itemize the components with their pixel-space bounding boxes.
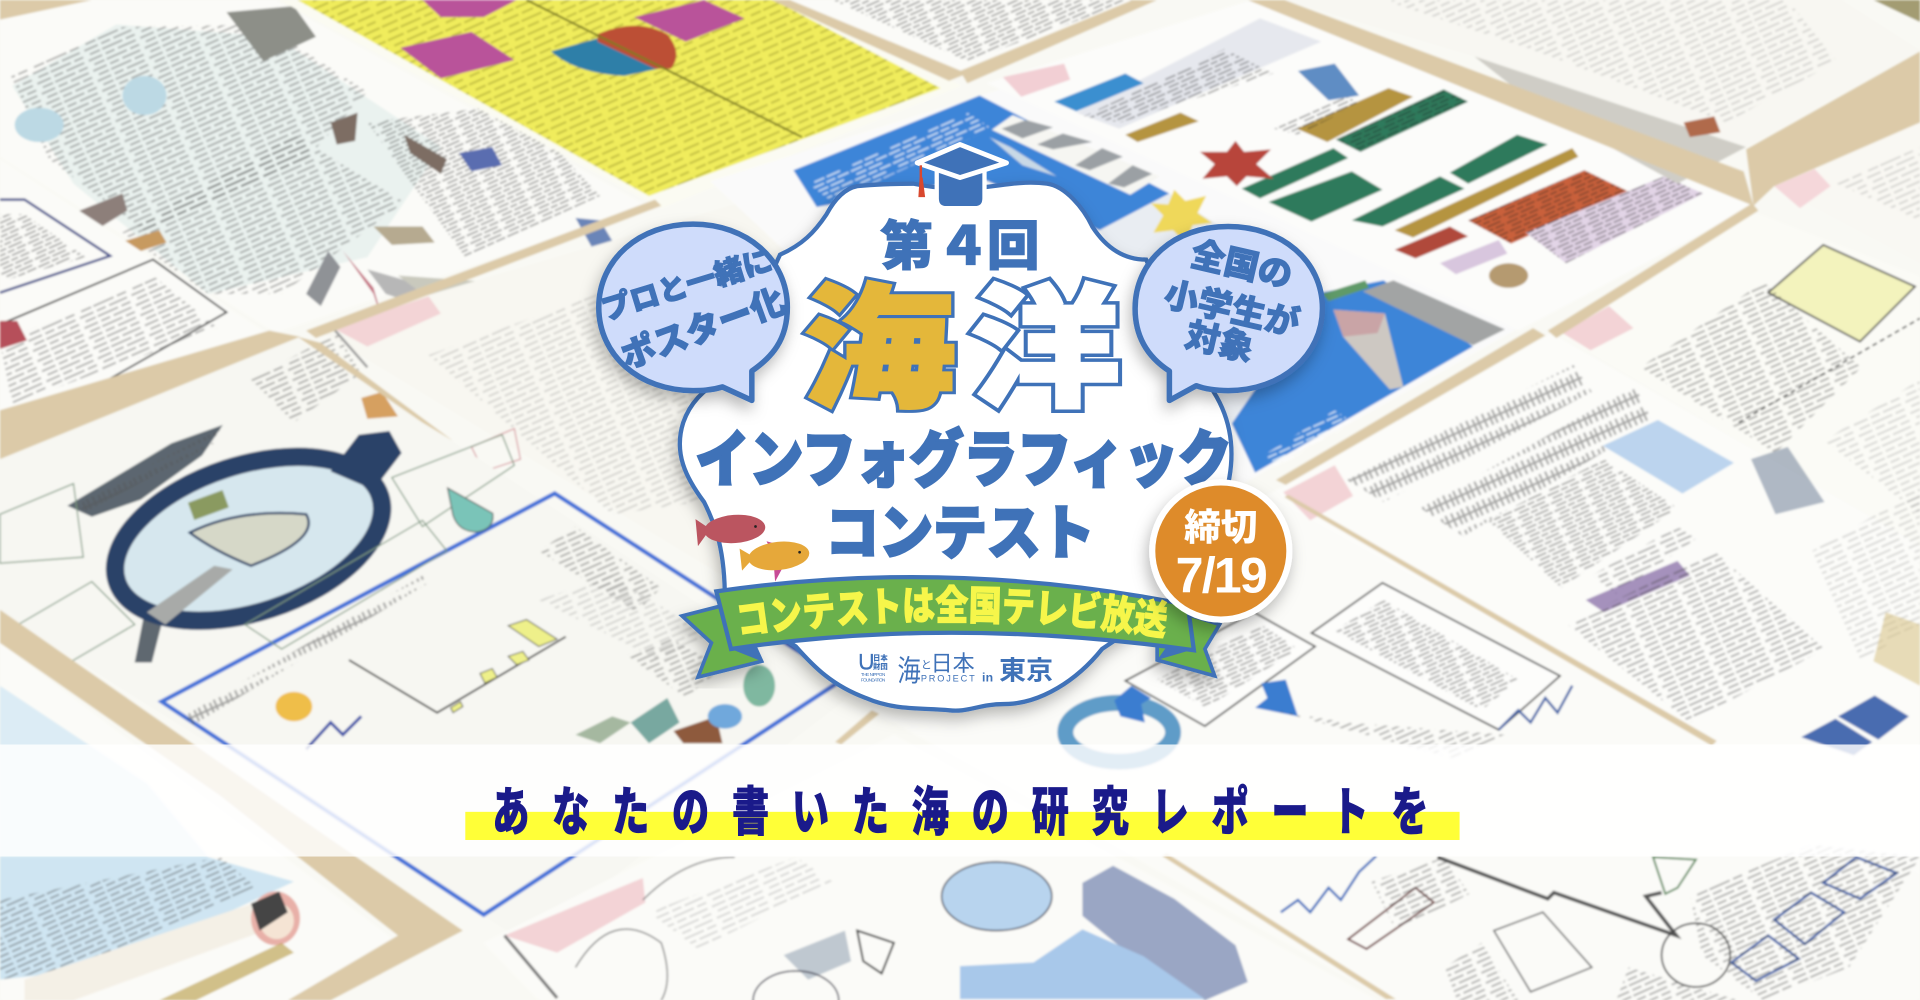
heading: 洋: 洋 (970, 276, 1121, 425)
logo: Nippon Foundation and Umi to Nippon Project in Tokyo: 財団 (873, 662, 888, 671)
ribbon: green banner (716, 577, 1194, 650)
icon: graduation cap (917, 144, 1007, 208)
poster: faint handwriting with pink tag (316, 190, 1224, 576)
poster: handwritten notes top middle (790, 0, 1145, 76)
speech bubble: プロと一緒にポスター化: プロと一緒に (598, 244, 776, 327)
heading: 海: 海 (804, 276, 955, 425)
logo: Nippon Foundation and Umi to Nippon Project in Tokyo: と (921, 659, 932, 672)
logo: Nippon Foundation and Umi to Nippon Project in Tokyo: 日本 (931, 651, 975, 676)
logo: Nippon Foundation and Umi to Nippon Project in Tokyo: 東京 (999, 656, 1053, 686)
logo: Nippon Foundation and Umi to Nippon Project in Tokyo: FOUNDATION (861, 677, 885, 682)
speech bubble: 全国の小学生が対象: 全国の (1187, 236, 1296, 296)
heading: 洋: 洋 (970, 276, 1121, 425)
poster: right edge paper (1774, 122, 1920, 263)
poster: colourful map top left (0, 0, 647, 343)
icon: yellow fish (740, 539, 811, 582)
logo: Nippon Foundation and Umi to Nippon Project in Tokyo: THE NIPPON (861, 672, 885, 677)
heading: 海: 海 (804, 276, 955, 425)
speech bubble: 全国の小学生が対象: 対象 (1182, 317, 1257, 369)
heading: インフォグラフィック: インフォグラフィック (696, 426, 1232, 494)
poster: green boxes DNA report (987, 0, 1753, 331)
logo: Nippon Foundation and Umi to Nippon Project in Tokyo: PROJECT (921, 673, 975, 683)
deadline badge: 締切 7/19: 締切 (1184, 507, 1258, 548)
poster: diagrams and arrows report (845, 496, 1920, 1000)
poster: blue shark teeth report (710, 88, 1518, 484)
heading: コンテスト: コンテスト (825, 501, 1095, 566)
speech bubble: 全国の小学生が対象 (1135, 227, 1322, 400)
ribbon: tails (682, 602, 1220, 677)
ribbon text: コンテストは全国テレビ放送: コンテストは全国テレビ放送 (738, 584, 1168, 638)
poster: blue wash report bottom left (0, 643, 398, 1000)
poster: top right paper (1284, 0, 1920, 184)
badge outline (680, 183, 1231, 711)
caption: あなたの書いた海の研究レポートを: あなたの書いた海の研究レポートを (492, 783, 1451, 842)
logo: Nippon Foundation and Umi to Nippon Project in Tokyo: 海 (898, 655, 921, 688)
poster: boxed notes left edge (0, 159, 267, 431)
white caption band (0, 744, 1920, 857)
poster: yellow note box report (1556, 213, 1920, 545)
poster: large handwritten title report (1266, 333, 1920, 876)
icon: red fish (696, 513, 766, 546)
logo: Nippon Foundation and Umi to Nippon Project in Tokyo (861, 651, 1053, 688)
logo: Nippon Foundation and Umi to Nippon Project in Tokyo: in (982, 670, 993, 684)
poster: sunfish skeleton report (0, 333, 845, 943)
deadline badge: 締切 7/19: 7/19 (1176, 548, 1267, 604)
poster: yellow sunfish report (279, 0, 961, 208)
yellow highlight bar (465, 812, 1460, 840)
poster: blue water drawing bottom centre (484, 735, 1378, 1000)
badge: contest emblem (667, 142, 1240, 728)
speech bubble: プロと一緒にポスター化 (598, 224, 790, 400)
logo: Nippon Foundation and Umi to Nippon Project in Tokyo: 日本 (873, 654, 888, 663)
speech bubble: 全国の小学生が対象: 小学生が (1161, 275, 1303, 344)
deadline badge: 締切 7/19 (1152, 482, 1289, 620)
heading: 第4回: 第４回 (880, 217, 1040, 276)
speech bubble: プロと一緒にポスター化: ポスター化 (616, 282, 790, 376)
